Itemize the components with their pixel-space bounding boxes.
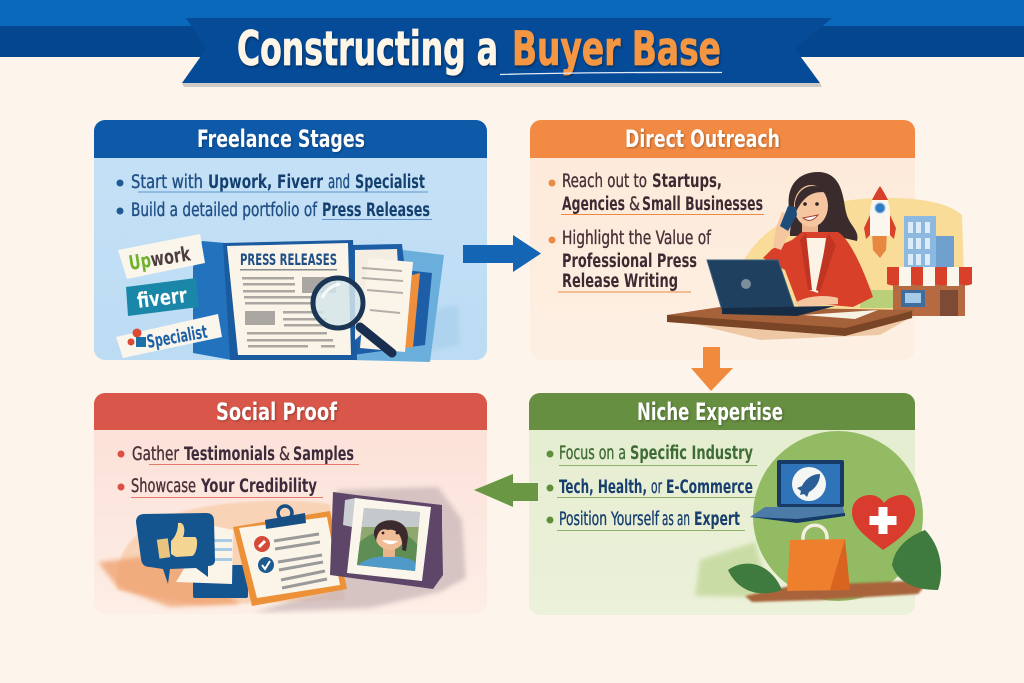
illustration: desk [667,307,913,340]
heading: social proof: Social Proof [216,398,337,426]
bullet list: niche expertise: or [651,477,662,498]
illustration: brush background [98,487,466,612]
bullet list: direct outreach [548,171,764,292]
bullet list: social proof: Gather [132,444,179,465]
bullet list: direct outreach: & [629,194,640,215]
bullet list: niche expertise: Position Yourself [559,509,660,530]
bullet list: freelance stages: and [328,172,350,193]
illustration: rocket [864,186,896,258]
bullet list: freelance stages: Start with [131,172,203,193]
bullet list: niche expertise: E-Commerce [666,477,753,498]
heading: freelance stages: Freelance Stages [197,125,365,153]
arrow: outreach to niche [691,347,733,391]
icon: laptop with rocket [750,460,845,523]
icon: checklist clipboard [233,506,347,606]
title banner [182,18,832,87]
illustration: office building [904,216,954,272]
bullet list: niche expertise: as an [662,509,690,530]
header band [0,0,1024,57]
illustration: document stack [176,525,248,598]
bullet list: freelance stages: Upwork, Fiverr [208,172,324,193]
icon: heart with cross [852,495,915,550]
bullet list: freelance stages: Build a detailed portfolio of [131,200,318,221]
heading: niche expertise: Niche Expertise [637,398,783,426]
arrow: niche to social proof [474,474,538,507]
illustration: press release folder [193,240,460,362]
logo card: fiverr: fiverr [136,283,189,313]
illustration: backdrop glow [740,198,965,310]
logo card: specialist: Specialist [145,322,209,353]
bullet list: niche expertise [546,443,758,531]
bullet list: freelance stages: Press Releases [322,200,430,221]
bullet list: social proof [118,444,359,498]
bullet list: niche expertise: Expert [694,509,740,530]
bullet list: direct outreach: Reach out to [562,171,647,192]
icon: leaves [728,530,941,593]
icon: thumbs up bubble [136,513,215,584]
bullet list: niche expertise: Specific Industry [630,443,753,464]
bullet list: direct outreach: Agencies [562,194,625,215]
illustration: storefront [887,267,972,316]
bullet list: freelance stages [116,172,432,221]
panel: social proof [94,393,487,614]
bullet list: direct outreach: Startups, [652,171,722,192]
bullet list: direct outreach: Release Writing [562,271,678,292]
bullet list: niche expertise: Focus on a [559,443,626,464]
panel: niche expertise [529,393,941,615]
bullet list: direct outreach: Highlight the Value of [562,228,712,249]
panel: direct outreach [530,120,972,360]
bullet list: direct outreach: Professional Press [562,251,697,272]
title banner: Buyer Base [512,22,721,77]
logo card: upwork: Upwork [127,241,193,275]
heading: direct outreach: Direct Outreach [625,125,780,153]
bullet list: direct outreach: Small Businesses [642,194,763,215]
illustration: press release folder: PRESS RELEASES [240,250,337,269]
bullet list: social proof: & [279,444,290,465]
logo card: specialist [116,314,222,358]
title banner: Constructing a [237,22,498,77]
illustration: woman on phone [763,172,873,307]
illustration: laptop [707,260,835,316]
bullet list: social proof: Showcase [131,476,196,497]
bullet list: social proof: Your Credibility [200,476,317,497]
bullet list: social proof: Testimonials [184,444,275,465]
logo card: fiverr [126,278,199,316]
logo card: upwork [118,234,205,279]
bullet list: social proof: Samples [293,444,354,465]
icon: client photo [330,492,443,589]
bullet list: freelance stages: Specialist [355,172,425,193]
arrow: freelance to outreach [463,235,541,272]
bullet list: niche expertise: Tech, Health, [559,477,647,498]
panel: freelance stages [94,120,487,362]
icon: shopping bag [787,525,850,591]
illustration: green circle backdrop [695,431,930,602]
